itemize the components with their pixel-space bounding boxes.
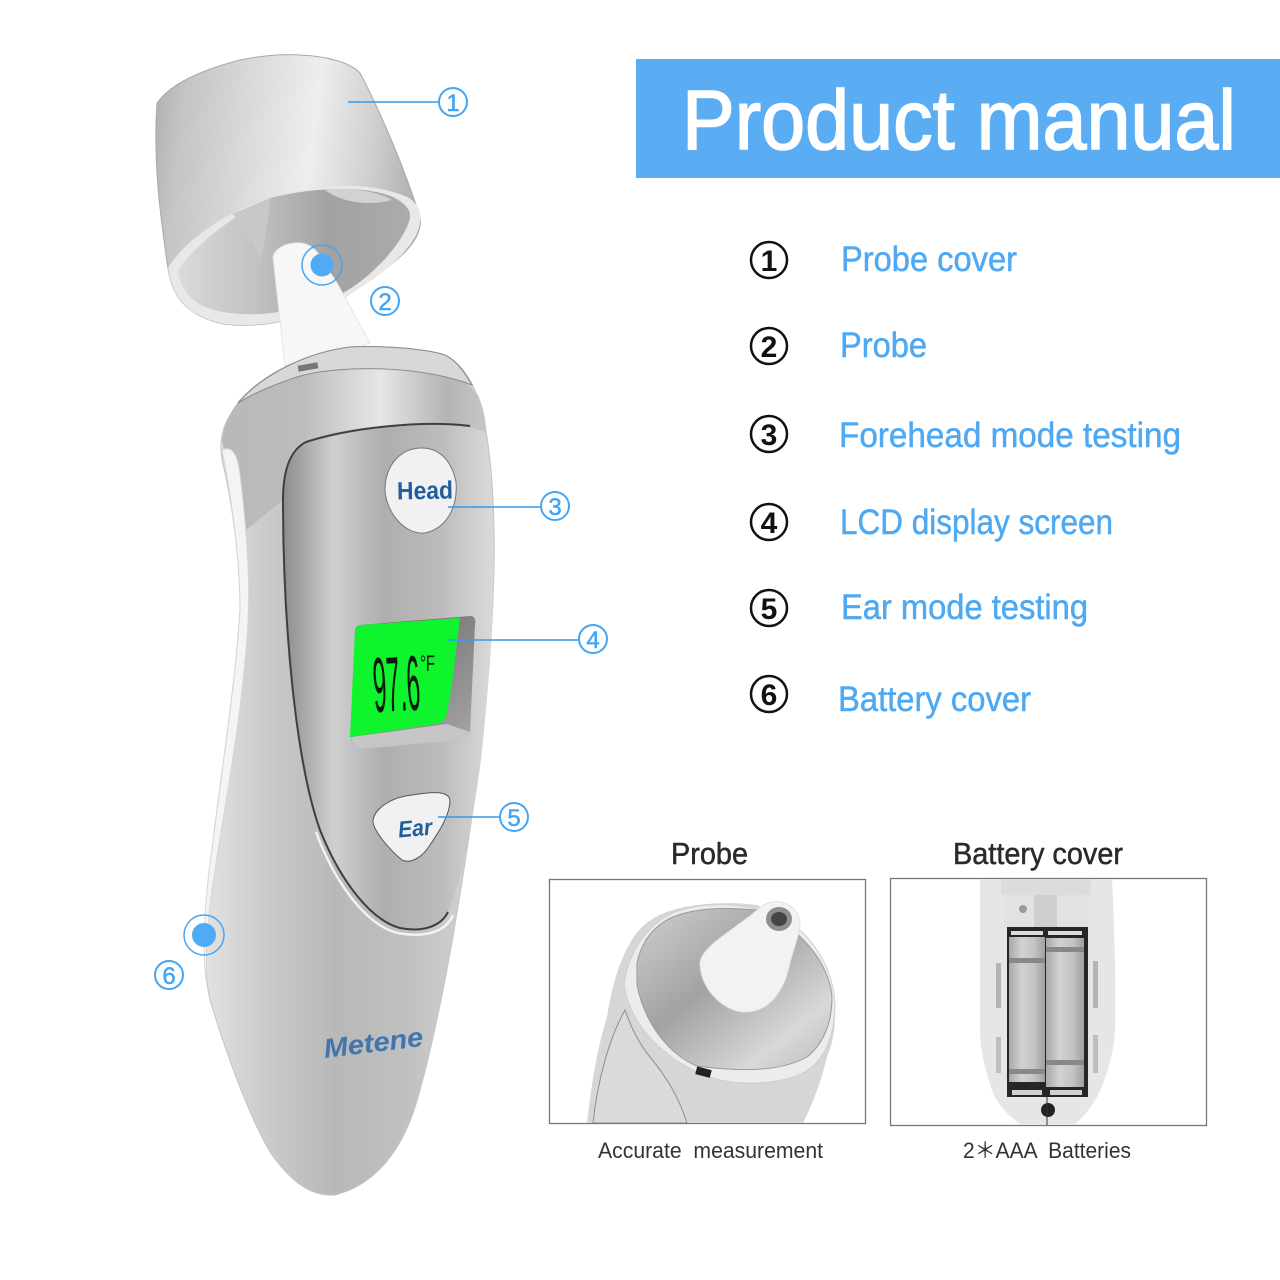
ear label: Ear <box>397 813 434 842</box>
callout 5: 5 <box>507 805 521 832</box>
shoulder <box>222 362 486 530</box>
panel: battery detail <box>890 836 1206 1163</box>
probe image frame <box>550 880 866 1124</box>
item 6: Battery cover <box>838 680 1031 719</box>
callout 3: 3 <box>548 494 562 521</box>
callout 6 <box>155 915 224 990</box>
callout 4: 4 <box>586 627 600 654</box>
item 6 <box>751 676 1031 719</box>
panel: probe detail <box>550 836 866 1163</box>
battery compartment <box>980 878 1115 1126</box>
rim slot <box>298 362 318 372</box>
battery caption: 2＊AAA Batteries <box>963 1138 1131 1163</box>
lcd unit: °F <box>420 651 435 676</box>
head button <box>385 448 456 533</box>
item 6: 6 <box>761 679 777 712</box>
parts list <box>751 240 1181 719</box>
head label: Head <box>397 477 453 505</box>
lcd display: 97.6 <box>371 639 422 729</box>
battery image frame <box>890 878 1206 1126</box>
callout 1: 1 <box>446 90 460 117</box>
probe caption: Accurate measurement <box>598 1138 823 1163</box>
item 2 <box>751 326 927 365</box>
item 1: 1 <box>761 245 777 278</box>
title text: Product manual <box>682 73 1236 167</box>
illustration: thermometer <box>156 55 494 1195</box>
item 2: 2 <box>761 331 777 364</box>
brand logo: Metene <box>322 1022 425 1064</box>
battery heading: Battery cover <box>953 836 1123 871</box>
probe heading: Probe <box>671 836 748 871</box>
probe <box>273 243 370 366</box>
item 4: 4 <box>761 507 778 540</box>
front panel <box>283 424 494 935</box>
callout 5 <box>438 803 528 832</box>
item 5: Ear mode testing <box>841 588 1088 627</box>
callout 3 <box>448 492 569 521</box>
probe close-up <box>587 902 835 1123</box>
item 4 <box>751 503 1113 542</box>
item 5: 5 <box>761 593 777 626</box>
item 3: 3 <box>761 419 777 452</box>
body <box>205 347 494 1195</box>
callout 4 <box>448 625 607 654</box>
probe cover <box>156 55 420 325</box>
callout 2: 2 <box>378 289 392 316</box>
top rim <box>238 347 472 403</box>
title banner <box>636 59 1280 178</box>
item 5 <box>751 588 1088 627</box>
item 1 <box>751 240 1017 279</box>
callout 6: 6 <box>162 963 176 990</box>
callout 2 <box>302 245 399 316</box>
lcd display <box>350 616 475 749</box>
item 1: Probe cover <box>841 240 1017 279</box>
side strip <box>204 449 249 985</box>
ear button <box>373 793 450 861</box>
item 2: Probe <box>840 326 927 365</box>
callout 1 <box>348 88 467 117</box>
item 4: LCD display screen <box>840 503 1113 542</box>
item 3: Forehead mode testing <box>839 416 1181 455</box>
